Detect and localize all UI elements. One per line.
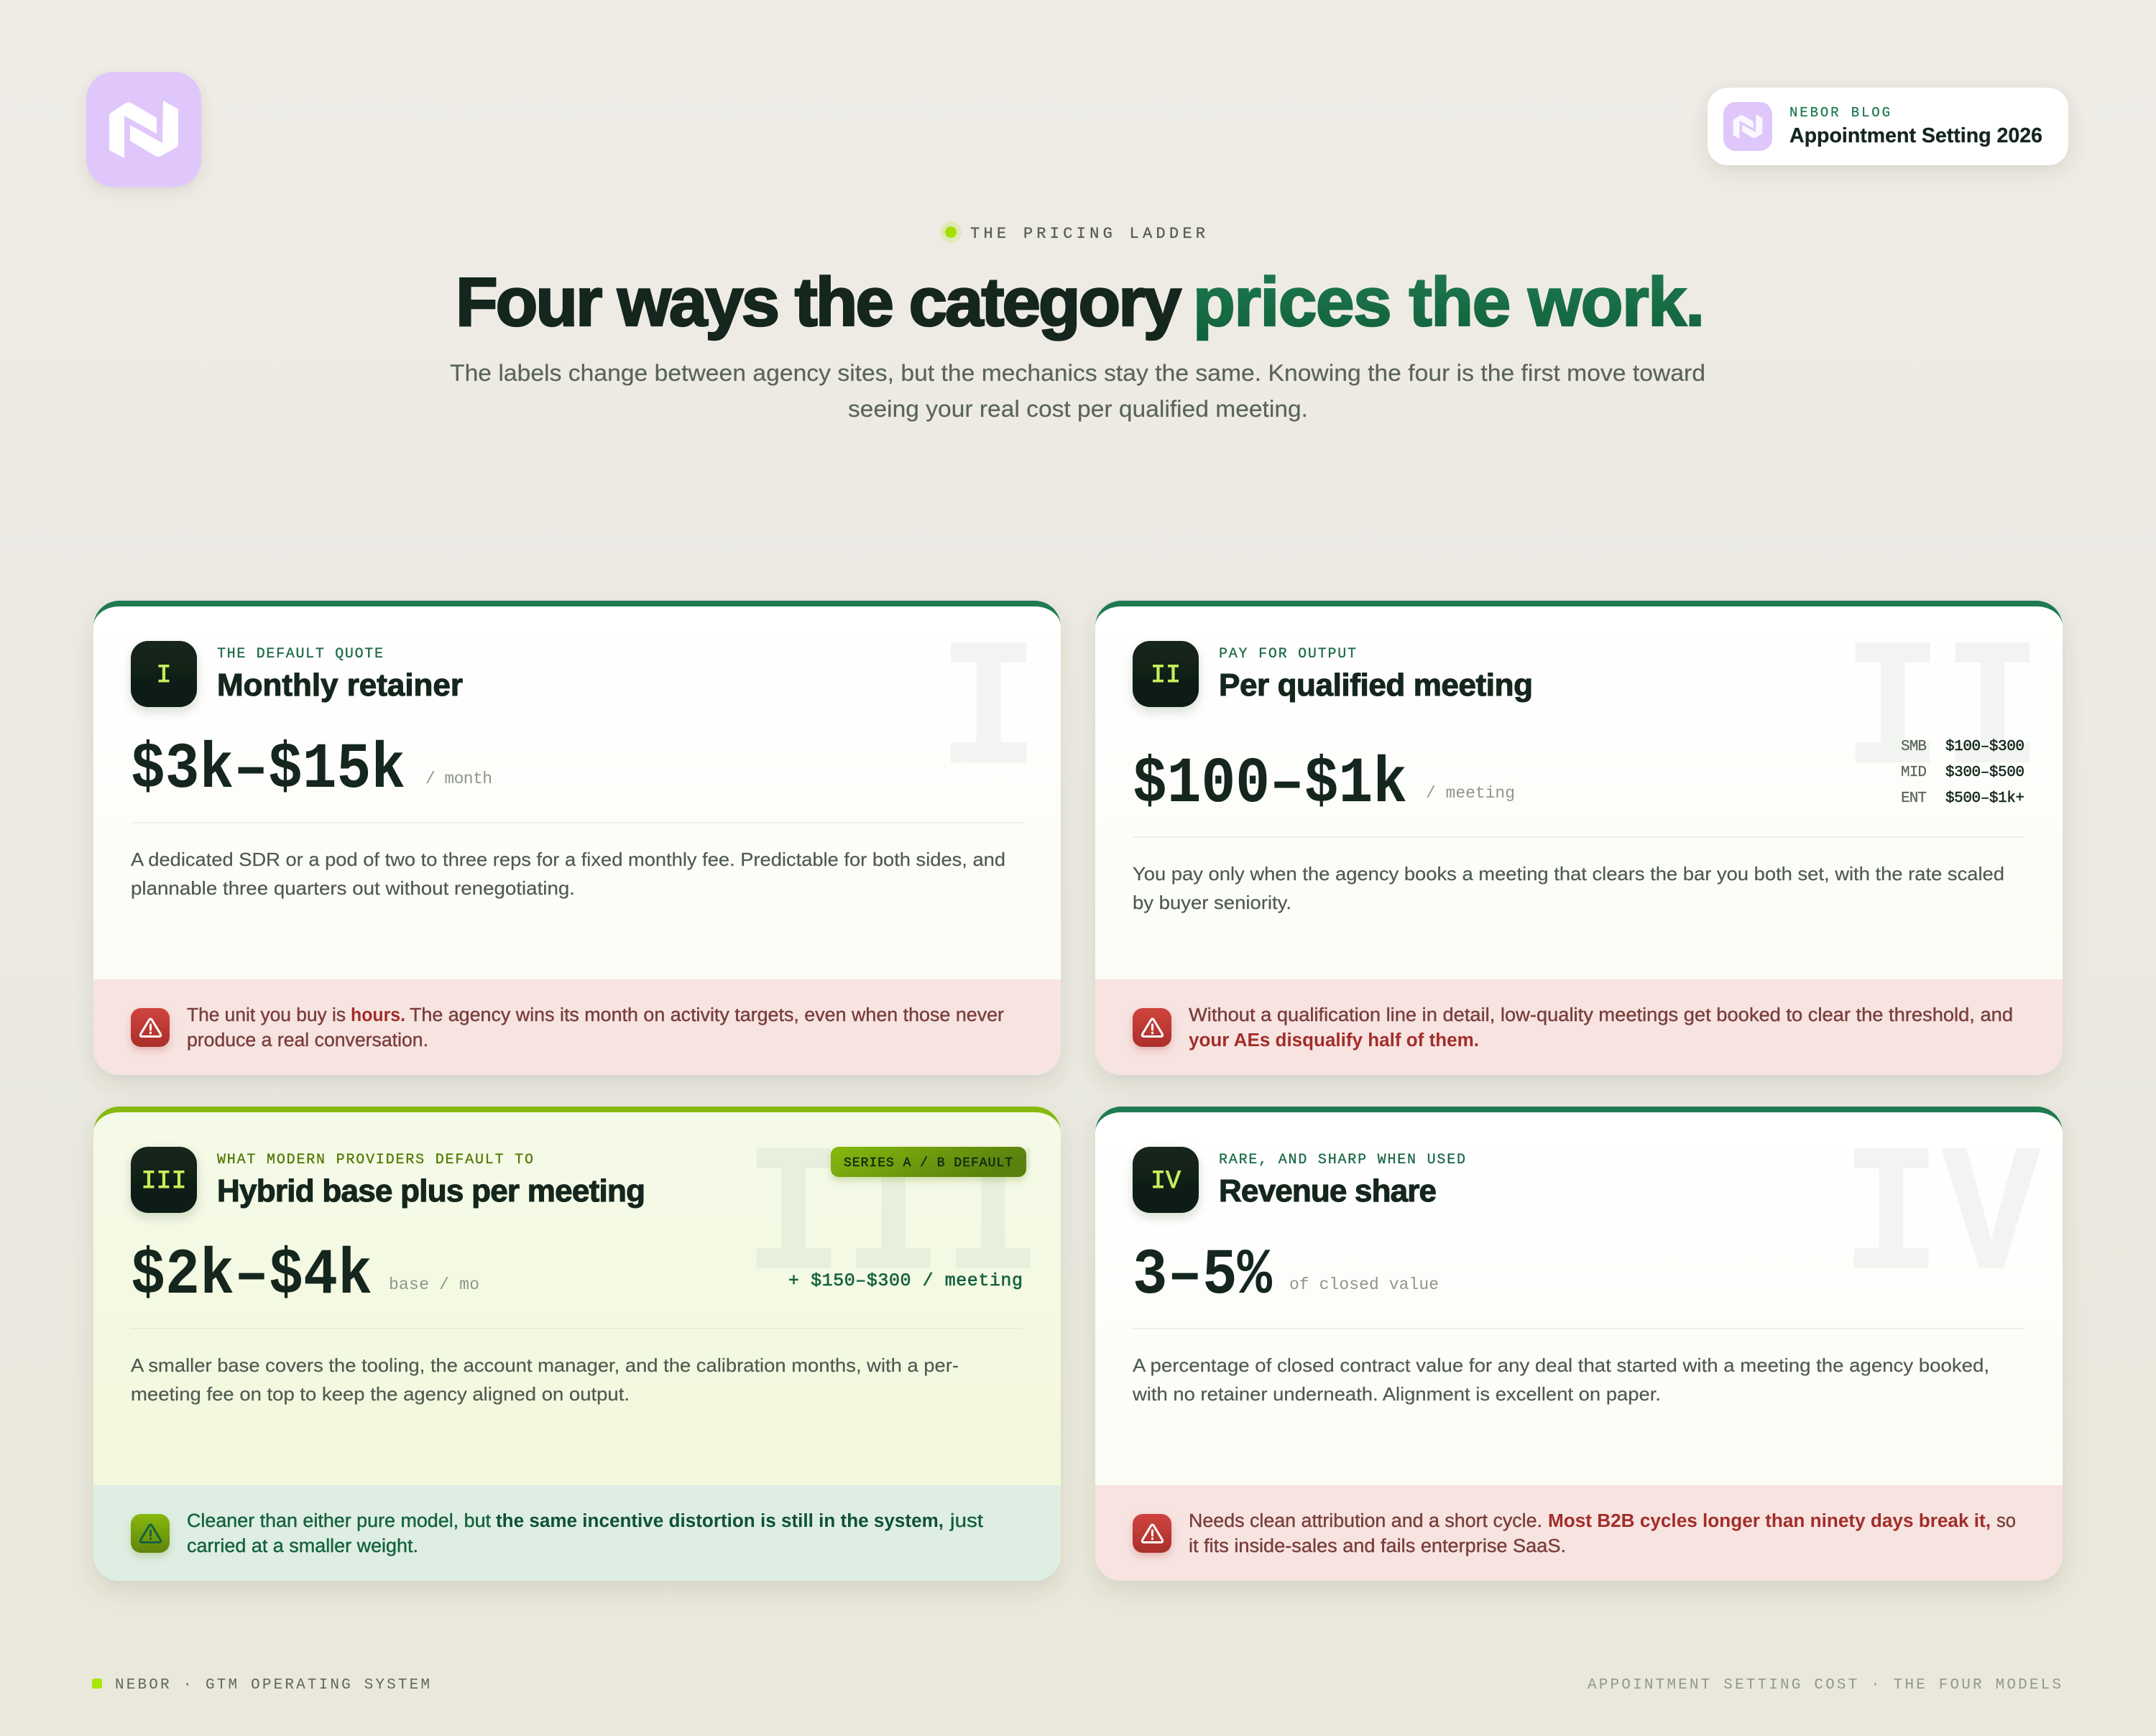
callout: trade-off text: the same incentive distortion is still in the system, [496,1511,944,1531]
watermark numeral: I [938,611,1039,818]
footer right: APPOINTMENT SETTING COST · THE FOUR MODELS [1588,1677,2061,1694]
body text: plannable three quarters out without renegotiating. [131,877,575,899]
callout: warning text: The agency wins its month on activity targets, even when those never [410,1005,1005,1025]
icon: numeral II: II [1151,661,1181,690]
title [456,264,1705,341]
watermark numeral: II [1843,611,2042,818]
body text: A smaller base covers the tooling, the account manager, and the calibration months, with a per- [131,1354,959,1376]
callout: trade-off text: carried at a smaller weight. [187,1536,418,1556]
panel: II per qualified meeting [1095,601,2063,1075]
icon: badge logo [1723,102,1772,151]
watermark numeral: IV [1841,1117,2042,1324]
tier rates: SMB [1901,739,1927,755]
body text: with no retainer underneath. Alignment is excellent on paper. [1132,1383,1661,1405]
icon: warning [131,1008,170,1047]
eyebrow: WHAT MODERN PROVIDERS DEFAULT TO [217,1152,533,1168]
callout: trade-off text: Cleaner than either pure model, but [187,1511,491,1531]
footer left: NEBOR · GTM OPERATING SYSTEM [115,1677,430,1694]
callout: warning text: your AEs disqualify half of them. [1189,1030,1479,1051]
per meeting fee: + $150–$300 / meeting [788,1270,1023,1291]
body text [131,1354,959,1405]
icon: numeral I [131,641,197,707]
subtitle: seeing your real cost per qualified meeting. [848,396,1308,422]
price: 3–5% [1133,1239,1273,1313]
heading: Per qualified meeting [1219,668,1533,703]
tier rates [1901,739,2024,807]
heading: Monthly retainer [217,668,463,703]
tier rates: $300–$500 [1945,765,2024,781]
series pill: SERIES A / B DEFAULT [844,1156,1013,1171]
tier rates: $500–$1k+ [1945,790,2024,807]
icon: numeral IV [1133,1147,1199,1213]
callout: warning text: Most B2B cycles longer than ninety days break it, [1548,1511,1991,1531]
badge: Nebor blog [1708,88,2068,165]
callout: warning text: The unit you buy is [187,1005,346,1025]
eyebrow: the pricing ladder: THE PRICING LADDER [970,225,1205,243]
callout: trade-off text [187,1511,983,1556]
body text [1133,863,2004,913]
callout: warning text: produce a real conversation. [187,1030,428,1051]
price unit: base / mo [389,1275,479,1294]
watermark numeral: III [744,1117,1043,1324]
title: prices the work. [1193,264,1705,341]
eyebrow: RARE, AND SHARP WHEN USED [1219,1152,1465,1168]
price unit: / month [425,770,492,788]
tier rates: MID [1901,765,1927,781]
icon: numeral II [1133,641,1199,707]
icon: numeral I: I [156,661,172,690]
body text: by buyer seniority. [1133,892,1291,913]
body text: You pay only when the agency books a meeting that clears the bar you both set, with the rate scaled [1133,863,2004,885]
body text: A percentage of closed contract value for any deal that started with a meeting the agency booked, [1133,1354,1989,1376]
tier rates: $100–$300 [1945,739,2024,755]
price: $3k–$15k [131,734,405,807]
callout: warning text [187,1005,1005,1051]
icon: numeral IV: IV [1151,1167,1181,1196]
panel: I monthly retainer [93,601,1061,1075]
callout: warning text: Without a qualification line in detail, low-quality meetings get booked to clear the threshold, and [1189,1005,2013,1025]
logo: Nebor app icon [86,72,201,187]
callout: warning text: Needs clean attribution and a short cycle. [1189,1511,1542,1531]
price unit: of closed value [1289,1275,1439,1294]
icon: warning [131,1514,170,1553]
price unit: / meeting [1426,784,1515,803]
icon: numeral III: III [141,1167,187,1196]
callout: warning text: so [1996,1511,2016,1531]
badge title: Appointment Setting 2026 [1789,124,2042,147]
callout: trade-off text: just [949,1511,983,1531]
title: Four ways the category [456,264,1181,341]
panel: III hybrid base plus per meeting [93,1107,1061,1581]
series pill [831,1147,1026,1177]
badge eyebrow: NEBOR BLOG [1789,105,1890,121]
price: $100–$1k [1133,748,1407,821]
icon: warning [1133,1514,1171,1553]
icon: numeral III [131,1147,197,1213]
subtitle: The labels change between agency sites, but the mechanics stay the same. Knowing the four is the first move toward [450,360,1705,386]
body text: A dedicated SDR or a pod of two to three reps for a fixed monthly fee. Predictable for both sides, and [131,849,1005,870]
panel: IV revenue share [1095,1107,2063,1581]
icon: warning [1133,1008,1171,1047]
callout: warning text: it fits inside-sales and fails enterprise SaaS. [1189,1536,1566,1556]
callout: warning text: hours. [351,1005,405,1025]
body text [1132,1354,1989,1405]
callout: warning text [1189,1005,2013,1051]
callout: warning text [1189,1511,2016,1556]
body text [131,849,1005,899]
subtitle [450,360,1705,422]
price: $2k–$4k [131,1239,372,1313]
heading: Revenue share [1219,1173,1437,1209]
eyebrow: PAY FOR OUTPUT [1219,646,1356,662]
heading: Hybrid base plus per meeting [217,1173,645,1209]
body text: meeting fee on top to keep the agency aligned on output. [131,1383,630,1405]
tier rates: ENT [1901,790,1927,807]
eyebrow: THE DEFAULT QUOTE [217,646,383,662]
